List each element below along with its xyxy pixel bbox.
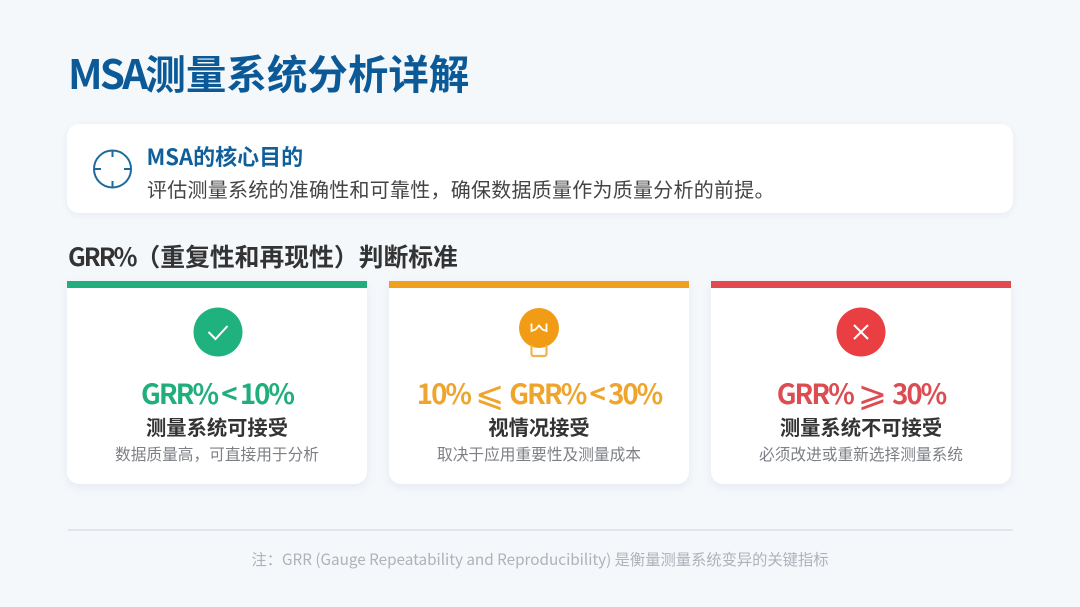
panel heading: MSA的核心目的	[146, 140, 303, 172]
footnote: 注：GRR (Gauge Repeatability and Reproducibility) 是衡量测量系统变异的关键指标	[251, 548, 829, 570]
title: MSA测量系统分析详解	[68, 42, 469, 101]
value: 10%⩽GRR% < 30%	[417, 366, 661, 417]
verdict: 测量系统不可接受	[780, 411, 942, 441]
value: GRR%⩾30%	[777, 366, 945, 417]
verdict: 视情况接受	[488, 411, 590, 441]
icon: check	[194, 308, 242, 356]
icon: cross	[836, 308, 886, 356]
panel text: 评估测量系统的准确性和可靠性，确保数据质量作为质量分析的前提。	[147, 174, 775, 202]
section heading: GRR%（重复性和再现性）判断标准	[68, 238, 458, 274]
icon: target	[93, 150, 132, 188]
description: 数据质量高，可直接用于分析	[115, 442, 319, 464]
verdict: 测量系统可接受	[146, 411, 288, 441]
value: GRR% < 10%	[141, 372, 293, 412]
icon: light bulb	[519, 308, 559, 358]
description: 必须改进或重新选择测量系统	[759, 442, 963, 464]
panel: acceptable	[67, 281, 367, 484]
panel: unacceptable	[711, 281, 1011, 484]
panel: conditional	[389, 281, 689, 484]
description: 取决于应用重要性及测量成本	[437, 442, 641, 464]
panel: core purpose	[67, 124, 1013, 213]
